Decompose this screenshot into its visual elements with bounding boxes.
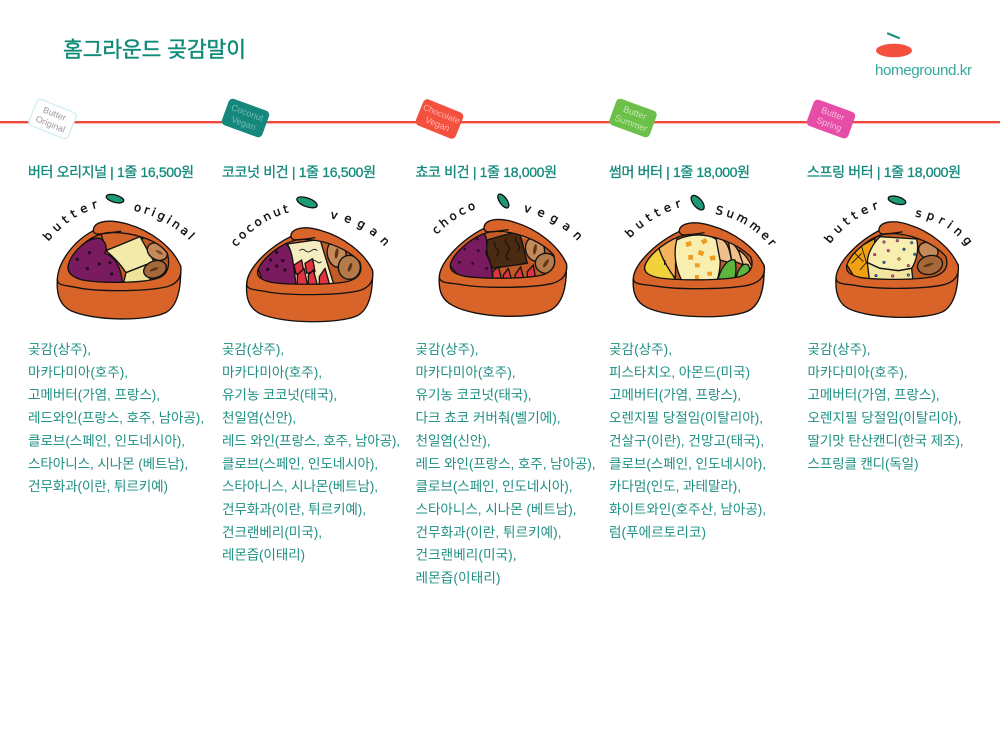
- panel: coconut vegan: [222, 98, 400, 563]
- bowl illustration: butter original: original: [134, 204, 196, 240]
- panel: butter spring: [806, 100, 972, 472]
- ingredient list: butter spring: 고메버터(가염, 프랑스),: [808, 388, 940, 403]
- ingredient list: butter original: [28, 342, 204, 494]
- panel: chocolate vegan: [416, 99, 596, 586]
- ingredient list: butter summer: 클로브(스페인, 인도네시아),: [609, 456, 766, 471]
- tag: butter original: Original: [34, 114, 67, 135]
- bowl illustration: coconut vegan: vegan: [331, 212, 388, 246]
- ingredient list: butter summer: 럼(푸에르토리코): [609, 525, 706, 540]
- ingredient list: butter spring: 마카다미아(호주),: [808, 365, 908, 380]
- tag: butter summer: Butter: [622, 104, 648, 122]
- ingredient list: chocolate vegan: 마카다미아(호주),: [416, 365, 516, 380]
- ingredient list: butter summer: 건살구(이란), 건망고(태국),: [609, 433, 764, 448]
- ingredient list: coconut vegan: 유기농 코코넛(태국),: [222, 388, 337, 403]
- ingredient list: chocolate vegan: 곶감(상주),: [416, 342, 478, 357]
- ingredient list: butter summer: 오렌지필 당절임(이탈리아),: [609, 411, 763, 426]
- ingredient list: butter summer: 카다멈(인도, 과테말라),: [609, 479, 741, 494]
- ingredient list: chocolate vegan: 클로브(스페인, 인도네시아),: [416, 479, 572, 494]
- bowl illustration: coconut vegan: coconut: [232, 204, 289, 246]
- tag: chocolate vegan: Vegan: [424, 115, 451, 134]
- bowl illustration: butter original: butter: [42, 201, 97, 241]
- ingredient list: butter spring: 곶감(상주),: [808, 342, 870, 357]
- tag: chocolate vegan: [414, 98, 465, 140]
- tag: butter spring: Spring: [815, 115, 843, 133]
- bowl illustration: butter spring: spring: [915, 210, 972, 246]
- ingredient list: butter summer: 화이트와인(호주산, 남아공),: [609, 502, 766, 517]
- ingredient list: chocolate vegan: 레몬즙(이태리): [416, 570, 500, 586]
- logo leaf: [888, 34, 899, 38]
- bowl illustration: butter summer: [624, 194, 776, 318]
- ingredient list: butter original: 건무화과(이란, 튀르키예): [28, 479, 168, 494]
- ingredient list: coconut vegan: 건크랜베리(미국),: [222, 525, 322, 540]
- ingredient list: coconut vegan: [222, 342, 400, 563]
- ingredient list: chocolate vegan: 건무화과(이란, 튀르키예),: [416, 525, 562, 540]
- heading: coconut vegan: 코코넛 비건 | 1줄 16,500원: [222, 164, 376, 180]
- ingredient list: chocolate vegan: 스타아니스, 시나몬 (베트남),: [416, 502, 576, 517]
- ingredient list: butter spring: [808, 342, 964, 471]
- heading: butter original: 버터 오리지널 | 1줄 16,500원: [28, 164, 194, 180]
- tag: coconut vegan: Coconut: [230, 102, 265, 123]
- heading: butter summer: 썸머 버터 | 1줄 18,000원: [609, 164, 750, 180]
- title: 홈그라운드 곶감말이: [63, 38, 246, 62]
- ingredient list: chocolate vegan: 레드 와인(프랑스, 호주, 남아공),: [416, 456, 596, 471]
- ingredient list: butter original: 스타아니스, 시나몬 (베트남),: [28, 456, 188, 471]
- heading: butter spring: 스프링 버터 | 1줄 18,000원: [807, 164, 961, 180]
- ingredient list: chocolate vegan: 건크랜베리(미국),: [416, 548, 516, 563]
- ingredient list: butter original: 클로브(스페인, 인도네시아),: [28, 433, 185, 448]
- red line: [0, 121, 1000, 123]
- tag: butter spring: [806, 98, 856, 140]
- ingredient list: butter spring: 딸기맛 탄산캔디(한국 제조),: [808, 433, 964, 448]
- bowl illustration: coconut vegan: [232, 196, 388, 322]
- ingredient list: butter summer: 피스타치오, 아몬드(미국): [609, 365, 750, 380]
- ingredient list: coconut vegan: 클로브(스페인, 인도네시아),: [222, 456, 378, 471]
- ingredient list: butter original: 레드와인(프랑스, 호주, 남아공),: [28, 411, 204, 426]
- ingredient list: butter spring: 스프링클 캔디(독일): [808, 456, 918, 471]
- bowl illustration: chocolate vegan: choco: [434, 203, 475, 234]
- panel: butter original: [28, 98, 204, 494]
- ingredient list: butter original: 고메버터(가염, 프랑스),: [28, 388, 160, 403]
- ingredient list: chocolate vegan: 천일염(신안),: [416, 433, 490, 448]
- bowl illustration: butter summer: Summer: [716, 206, 776, 245]
- ingredient list: butter spring: 오렌지필 당절임(이탈리아),: [808, 411, 962, 426]
- ingredient list: chocolate vegan: 유기농 코코넛(태국),: [416, 388, 532, 403]
- bowl illustration: butter spring: butter: [824, 202, 878, 244]
- bowl illustration: butter summer: butter: [624, 200, 680, 238]
- ingredient list: butter original: 마카다미아(호주),: [28, 365, 128, 380]
- ingredient list: coconut vegan: 곶감(상주),: [222, 342, 284, 357]
- panel: butter summer: [609, 98, 776, 540]
- ingredient list: coconut vegan: 레드 와인(프랑스, 호주, 남아공),: [222, 433, 400, 448]
- tag: coconut vegan: [221, 97, 270, 139]
- ingredient list: coconut vegan: 마카다미아(호주),: [222, 365, 322, 380]
- tag: butter summer: Summer: [613, 113, 649, 134]
- tag: butter original: Butter: [42, 105, 68, 123]
- bowl illustration: chocolate vegan: [434, 193, 581, 317]
- heading: chocolate vegan: 쵸코 비건 | 1줄 18,000원: [416, 164, 557, 180]
- ingredient list: butter summer: 곶감(상주),: [609, 342, 672, 357]
- ingredient list: chocolate vegan: 다크 쵸코 커버춰(벨기에),: [416, 411, 560, 426]
- logo: homeground.kr: [875, 34, 972, 79]
- tag: butter spring: Butter: [820, 105, 846, 123]
- ingredient list: butter original: 곶감(상주),: [28, 342, 91, 357]
- bowl illustration: butter spring: [824, 195, 972, 318]
- tag: butter original: [28, 98, 77, 140]
- tag: coconut vegan: Vegan: [230, 114, 257, 132]
- bowl illustration: butter original: [42, 194, 196, 320]
- ingredient list: coconut vegan: 레몬즙(이태리): [222, 548, 305, 563]
- ingredient list: chocolate vegan: [416, 342, 596, 586]
- ingredient list: coconut vegan: 건무화과(이란, 튀르키예),: [222, 502, 366, 517]
- ingredient list: coconut vegan: 천일염(신안),: [222, 411, 296, 426]
- logo persimmon: [876, 44, 912, 57]
- bowl illustration: chocolate vegan: vegan: [525, 205, 581, 240]
- tag: butter summer: [608, 97, 658, 139]
- ingredient list: coconut vegan: 스타아니스, 시나몬(베트남),: [222, 479, 378, 494]
- tag: chocolate vegan: Chocolate: [422, 102, 462, 126]
- logo text: homeground.kr: [875, 62, 972, 79]
- ingredient list: butter summer: [609, 342, 766, 540]
- ingredient list: butter summer: 고메버터(가염, 프랑스),: [609, 388, 741, 403]
